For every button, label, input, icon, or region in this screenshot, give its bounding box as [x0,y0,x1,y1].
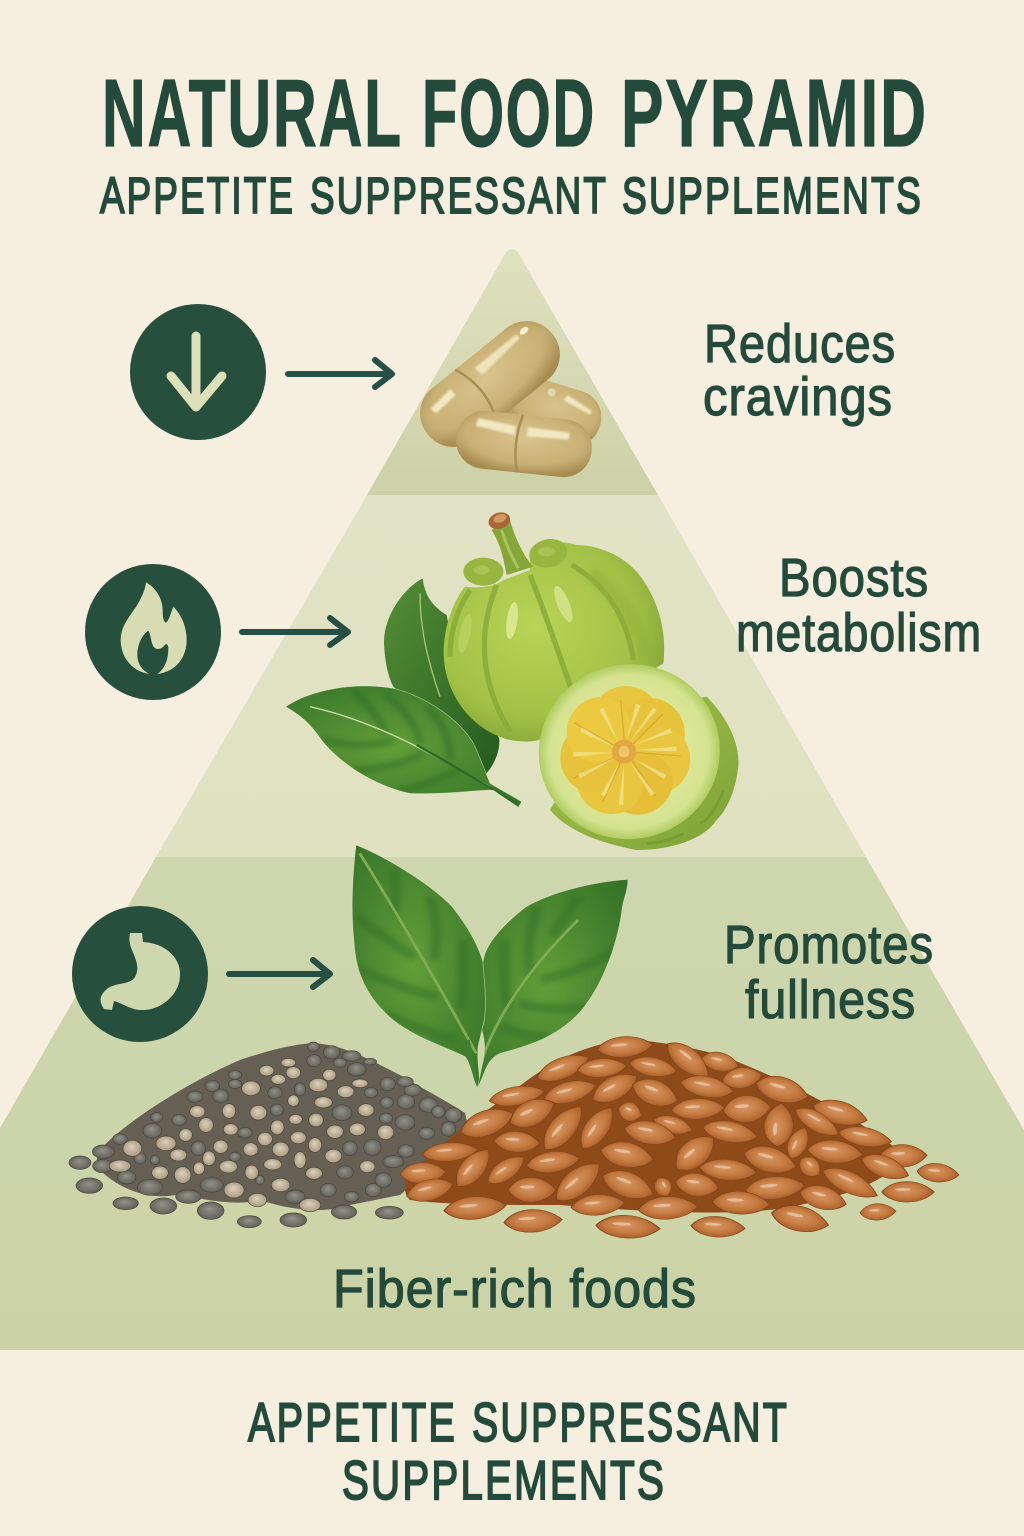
label: boosts metabolism [736,548,982,663]
label: fiber-rich foods: Fiber-rich foods [333,1259,697,1319]
pyramid tier: top [367,249,658,495]
front leaf [286,686,522,807]
footer text: SUPPRESSANT [472,1391,789,1453]
label: reduces cravings: Reduces [704,314,896,374]
arrow: middle tier [242,618,348,645]
fruit ribs [450,565,633,732]
icon: metabolism flame circle [85,564,221,700]
label: promotes fullness: fullness [745,970,916,1030]
arrow: base tier [229,960,330,987]
panel: pyramid [0,249,1024,1350]
label: promotes fullness [724,915,934,1030]
label: boosts metabolism: metabolism [736,603,982,663]
flax mound [405,1040,905,1212]
footer text: SUPPLEMENTS [342,1449,666,1511]
right leaf [477,879,628,1088]
label: reduces cravings [703,314,896,427]
subtitle [100,167,923,224]
halved fruit rind [550,697,739,850]
icon: capsules [407,308,608,480]
footer text [248,1391,789,1511]
back leaf [384,578,499,777]
chia mound [97,1043,470,1210]
halved fruit face [522,647,736,856]
icon: stomach circle [72,906,208,1042]
fruit lobes and stem [463,558,503,586]
label: promotes fullness: Promotes [724,915,934,975]
fruit body [444,542,664,742]
label: boosts metabolism: Boosts [779,548,929,608]
subtitle: APPETITE [100,167,295,224]
title [102,60,928,167]
arrow: top tier [288,360,392,387]
icon: flax seed pile [399,1034,960,1240]
pyramid tier: base [0,857,1024,1350]
label: reduces cravings: cravings [703,367,893,427]
subtitle: SUPPLEMENTS [622,167,923,224]
title: NATURAL [102,60,403,167]
left leaf [352,845,488,1088]
pyramid tier: middle [156,495,866,857]
icon: garcinia fruit with leaves [286,510,739,856]
icon: green leaves [352,845,628,1088]
icon: chia seed pile [69,1042,470,1228]
icon: reduces cravings circle [130,304,266,440]
halved fruit flesh [554,684,698,826]
subtitle: SUPPRESSANT [310,167,608,224]
footer text: APPETITE [248,1391,457,1453]
title: FOOD [422,60,596,167]
